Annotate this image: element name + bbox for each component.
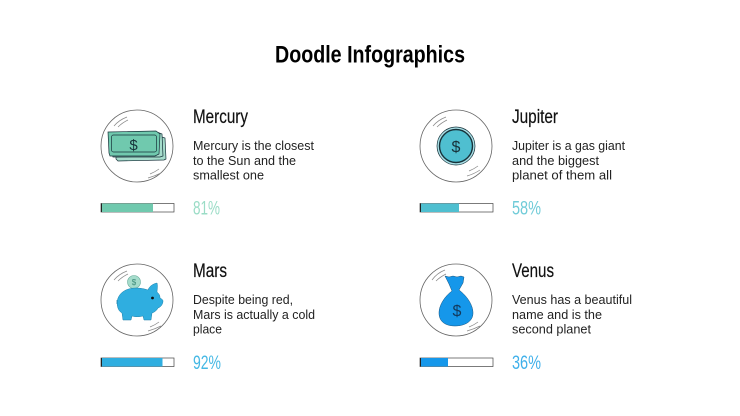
text: Jupiter description: Jupiter is a gas giant — [512, 138, 625, 153]
icon: money bag in circle — [420, 264, 492, 336]
value: 36%: 36% — [512, 353, 541, 374]
panel: Mars — [101, 261, 315, 374]
text: Mars description: Mars is actually a cold — [193, 307, 315, 322]
value: 92%: 92% — [193, 353, 221, 374]
text: Jupiter description: and the biggest — [512, 153, 599, 168]
text: Venus description: Venus has a beautiful — [512, 292, 632, 307]
icon: coin in circle: $ — [452, 139, 461, 156]
text: Mercury description — [193, 138, 314, 182]
panel: Jupiter — [420, 107, 625, 220]
value: 58%: 58% — [512, 198, 541, 220]
heading: Venus: Venus — [512, 261, 554, 282]
heading: Mercury: Mercury — [193, 107, 248, 128]
progress bar: 36% — [420, 358, 493, 366]
text: Mercury description: smallest one — [193, 168, 264, 182]
title: Doodle Infographics — [275, 42, 465, 68]
text: Mars description: Despite being red, — [193, 292, 293, 307]
text: Jupiter description — [512, 138, 625, 182]
panel: Venus — [420, 261, 632, 374]
icon: coin in circle — [420, 110, 492, 182]
text: Jupiter description: planet of them all — [512, 168, 612, 182]
heading: Mars: Mars — [193, 261, 227, 282]
progress bar: 81% — [101, 204, 174, 212]
text: Mercury description: Mercury is the closest — [193, 138, 314, 153]
value: 81%: 81% — [193, 198, 220, 220]
icon: piggy bank in circle — [101, 264, 173, 336]
text: Venus description: second planet — [512, 322, 591, 336]
text: Mercury description: to the Sun and the — [193, 153, 296, 168]
text: Mars description: place — [193, 322, 222, 336]
heading: Jupiter: Jupiter — [512, 107, 559, 128]
icon: banknotes in circle — [101, 110, 173, 182]
text: Mars description — [193, 292, 315, 336]
progress bar: 92% — [101, 358, 174, 366]
icon: money bag in circle: $ — [453, 303, 462, 320]
text: Venus description — [512, 292, 632, 336]
progress bar: 58% — [420, 204, 493, 212]
piggy body — [117, 283, 163, 320]
icon: piggy bank in circle: $ — [132, 278, 137, 287]
icon: banknotes in circle: $ — [129, 137, 138, 154]
text: Venus description: name and is the — [512, 307, 602, 322]
panel: Mercury — [101, 107, 314, 220]
